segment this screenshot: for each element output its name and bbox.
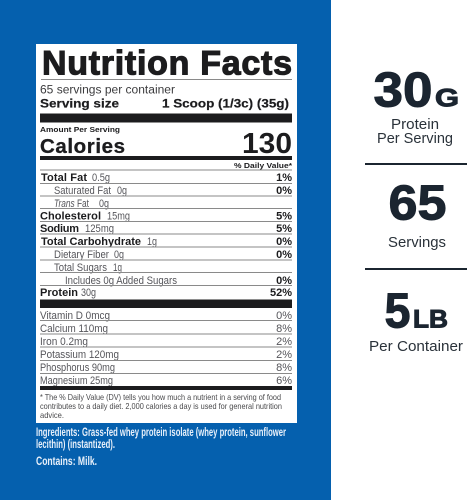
nutrient rows: 5% (276, 210, 292, 222)
vitamins and minerals: 2% (276, 349, 292, 361)
stat: 5lb per container: Per Container (369, 339, 463, 355)
nutrient rows: 0% (276, 249, 292, 261)
stat: 30g protein: 30 (374, 64, 432, 118)
vitamins and minerals: Calcium 110mg (40, 323, 108, 335)
nutrient rows: Saturated Fat (54, 185, 111, 197)
nutrient rows: 1g (113, 262, 122, 274)
nutrient rows: Cholesterol (40, 210, 101, 222)
nutrient rows: 0g (117, 185, 127, 197)
amount per serving: Amount Per Serving (40, 125, 120, 134)
vitamins and minerals: 0% (276, 310, 292, 322)
vitamins and minerals: Phosphorus 90mg (40, 362, 115, 374)
footnote: contributes to a daily diet. 2,000 calories a day is used for general nutrition (40, 401, 282, 411)
footnote (40, 392, 282, 420)
nutrient rows: Sodium (40, 223, 79, 235)
stat: 30g protein: Per Serving (377, 131, 453, 147)
nutrient rows: 0.5g (92, 172, 110, 184)
nutrient rows: 5% (276, 223, 292, 235)
nutrient rows: Total Sugars (54, 262, 107, 274)
nutrient rows: 52% (270, 287, 292, 299)
nutrient rows: 1% (276, 172, 292, 184)
calories (40, 128, 292, 160)
vitamins and minerals: Vitamin D 0mcg (40, 310, 110, 322)
serving size: 1 Scoop (1/3c) (35g) (162, 96, 289, 110)
calories: 130 (242, 128, 292, 160)
stat: 5lb per container (369, 284, 463, 355)
nutrient rows (40, 172, 292, 299)
nutrient rows: Includes 0g Added Sugars (65, 275, 177, 287)
stat: 5lb per container: LB (413, 306, 448, 334)
footnote: advice. (40, 410, 64, 420)
nutrient rows: Total Fat (41, 172, 87, 184)
heading: Nutrition Facts: Nutrition Facts (42, 44, 292, 82)
stat: 30g protein (374, 64, 459, 147)
nutrient rows: 0% (276, 275, 292, 287)
vitamins and minerals: 8% (276, 362, 292, 374)
stat: 65 servings: Servings (388, 235, 446, 251)
nutrient rows: 15mg (107, 210, 130, 222)
servings per container: 65 servings per container (40, 84, 175, 96)
stat: 30g protein: Protein (391, 117, 439, 133)
vitamins and minerals (40, 310, 292, 387)
nutrition facts label (36, 44, 297, 423)
nutrient rows: Protein (40, 287, 78, 299)
nutrient rows: 0% (276, 236, 292, 248)
vitamins and minerals: Potassium 120mg (40, 349, 119, 361)
stat: 65 servings (388, 176, 446, 251)
calories: Calories (40, 135, 125, 158)
vitamins and minerals: 6% (276, 375, 292, 387)
nutrient rows: Total Carbohydrate (41, 236, 141, 248)
daily value header: % Daily Value* (234, 163, 292, 170)
vitamins and minerals: Iron 0.2mg (40, 336, 88, 348)
allergen statement: Contains: Milk. (36, 456, 97, 468)
stat: 5lb per container: 5 (384, 284, 410, 338)
stat: 30g protein: G (435, 84, 459, 112)
nutrient rows: 0% (276, 185, 292, 197)
nutrient rows: 125mg (85, 223, 114, 235)
blue background panel (0, 0, 331, 500)
ingredients: Ingredients: Grass-fed whey protein isolate (whey protein, sunflower (36, 427, 286, 439)
nutrient rows: Trans Fat (54, 198, 89, 210)
stat: 65 servings: 65 (388, 176, 446, 230)
serving size (40, 96, 289, 110)
nutrient rows: 1g (147, 236, 157, 248)
nutrient rows: 0g (114, 249, 124, 261)
nutrient rows: Dietary Fiber (54, 249, 109, 261)
ingredients: lecithin) (instantized). (36, 439, 115, 451)
ingredients (36, 427, 286, 451)
footnote: * The % Daily Value (DV) tells you how much a nutrient in a serving of food (40, 392, 281, 402)
serving size: Serving size (40, 96, 119, 110)
vitamins and minerals: 2% (276, 336, 292, 348)
nutrient rows: 30g (81, 287, 96, 299)
vitamins and minerals: Magnesium 25mg (40, 375, 113, 387)
vitamins and minerals: 8% (276, 323, 292, 335)
nutrient rows: 0g (99, 198, 109, 210)
